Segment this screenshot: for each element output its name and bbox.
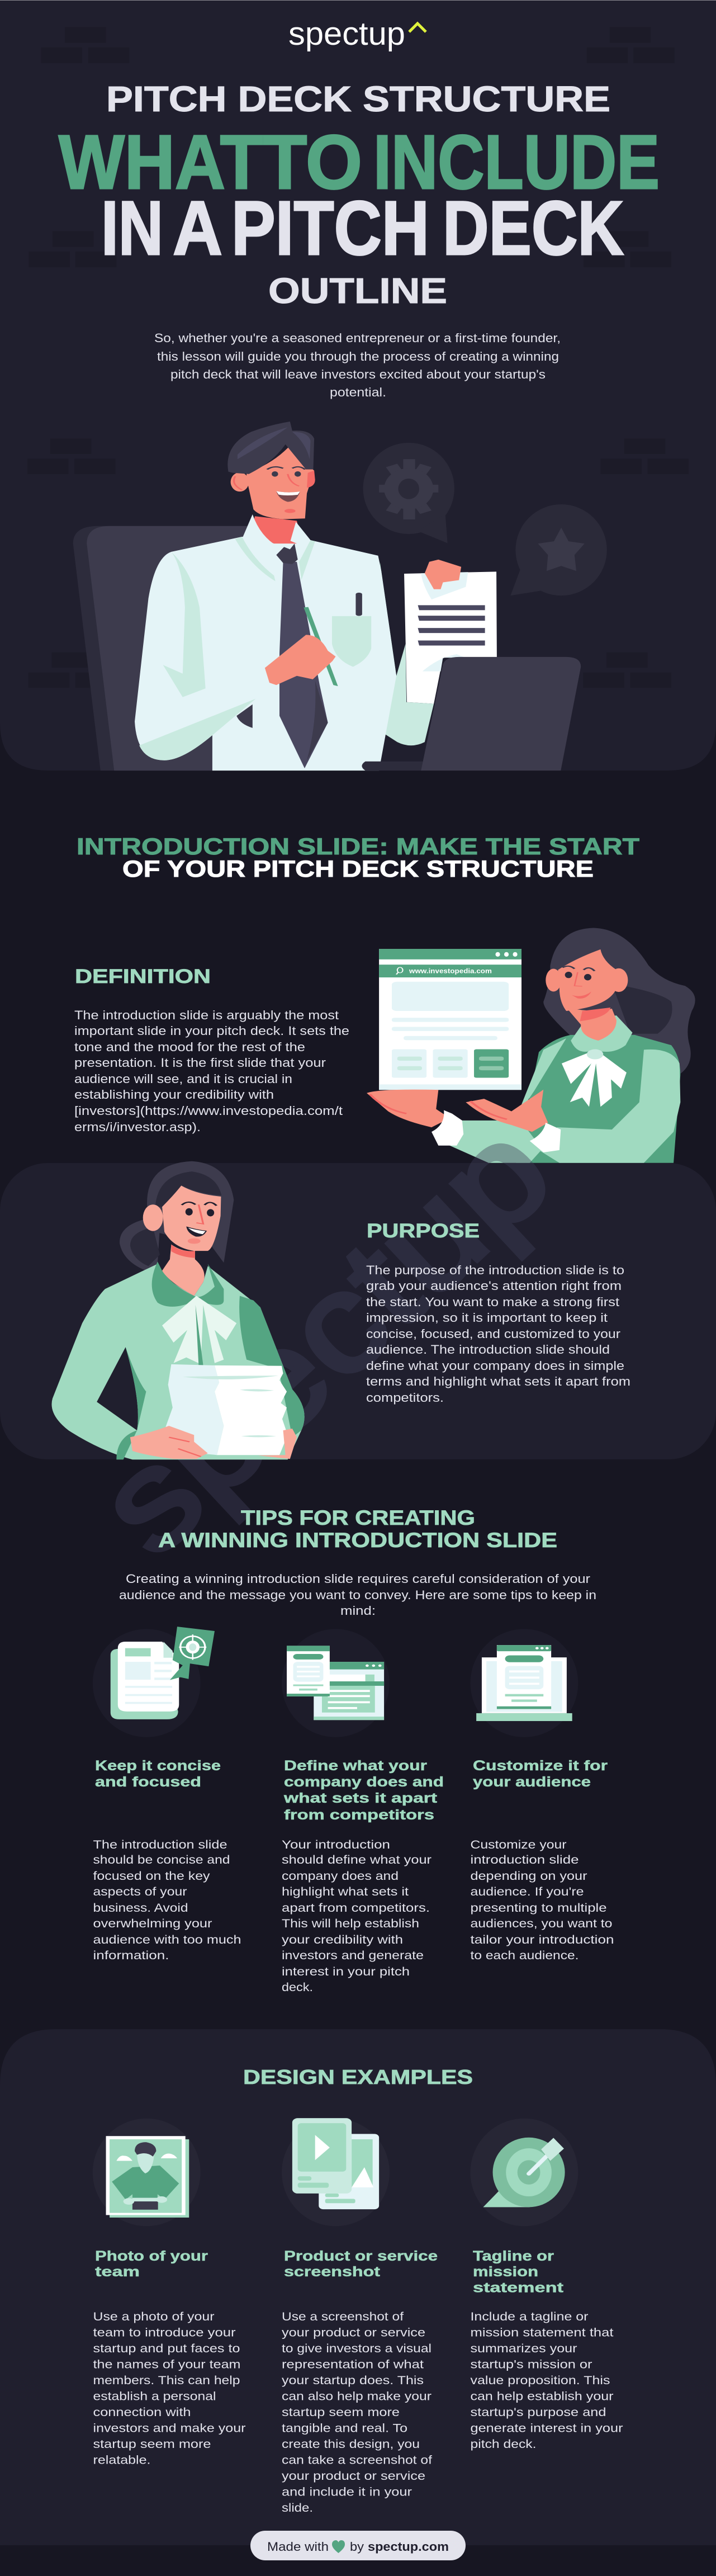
example 1: photo of your team: startup seem more: [93, 2438, 211, 2451]
tip 3: customize it: depending on your: [471, 1870, 587, 1883]
text: purpose body: terms and highlight what sets it apart from: [366, 1374, 630, 1388]
example 2: product or service screenshot: [282, 2248, 438, 2514]
example 1: photo of your team: team to introduce your: [93, 2326, 236, 2339]
footer pill: made with love by spectup.com: spectup.com: [368, 2540, 449, 2554]
section heading: introduction slide: [77, 833, 639, 882]
text: definition body: [investors](https://www.investopedia.com/t: [74, 1104, 343, 1118]
example 3: tagline or mission statement: startup's purpose and: [471, 2406, 606, 2419]
tip 3: customize it: tailor your introduction: [471, 1934, 614, 1946]
tip 3: customize it: to each audience.: [471, 1949, 579, 1962]
panel: hero background: [0, 0, 716, 771]
text: definition body: tone and the mood for the rest of the: [74, 1040, 305, 1054]
icon: gear speech bubble: [363, 443, 454, 543]
tip 2: define what your company does: your credibility with: [282, 1934, 403, 1946]
example 3: tagline or mission statement: Include a tagline or: [471, 2310, 588, 2323]
tip 2: define what your company does: from competitors: [284, 1807, 434, 1823]
example 3: tagline or mission statement: can help establish your: [471, 2390, 614, 2403]
example 3: tagline or mission statement: value proposition. This: [471, 2374, 610, 2387]
tip 3: customize it: [471, 1758, 614, 1962]
text: purpose body: competitors.: [366, 1391, 444, 1405]
illustration: man presenting document: [73, 422, 607, 771]
text: purpose body: define what your company does in simple: [366, 1359, 624, 1373]
example 2: product or service screenshot: Product or service: [284, 2248, 438, 2264]
text: tips intro: mind:: [340, 1604, 376, 1618]
icon: document with target: [93, 1627, 215, 1737]
example 1: photo of your team: Photo of your: [95, 2248, 208, 2264]
example 2: product or service screenshot: your startup does. This: [282, 2374, 424, 2387]
tip 2: define what your company does: company does and: [284, 1774, 444, 1790]
example 1: photo of your team: the names of your team: [93, 2358, 240, 2371]
example 3: tagline or mission statement: pitch deck.: [471, 2438, 537, 2451]
illustration: woman with paper stack: [51, 1161, 305, 1459]
watermark: spectup: [68, 1092, 579, 1584]
heading: tips: [158, 1506, 557, 1552]
tip 1: keep it concise: focused on the key: [93, 1870, 210, 1883]
example 2: product or service screenshot: representation of what: [282, 2358, 424, 2371]
example 1: photo of your team: establish a personal: [93, 2390, 216, 2403]
tie: [276, 543, 328, 768]
section heading: introduction slide: OF YOUR PITCH DECK STRUCTURE: [122, 855, 594, 882]
tip 2: define what your company does: investors and generate: [282, 1949, 424, 1962]
example 1: photo of your team: [93, 2248, 246, 2467]
tip 2: define what your company does: company does and: [282, 1870, 399, 1883]
tip 2: define what your company does: deck.: [282, 1981, 313, 1994]
title: WHAT: [59, 120, 263, 205]
intro paragraph: So, whether you're a seasoned entrepreneur or a first-time founder,: [154, 331, 561, 345]
intro paragraph: this lesson will guide you through the process of creating a winning: [157, 349, 559, 363]
design example icons: [93, 2118, 578, 2226]
footer pill: made with love by spectup.com: Made with: [267, 2540, 329, 2554]
tip 2: define what your company does: This will help establish: [282, 1917, 419, 1930]
example 3: tagline or mission statement: statement: [473, 2280, 564, 2296]
text: tips intro: audience and the message you want to convey. Here are some tips to keep in: [119, 1588, 596, 1602]
example 2: product or service screenshot: your product or service: [282, 2326, 425, 2339]
tip 3: customize it: introduction slide: [471, 1854, 579, 1866]
text: definition body: important slide in your pitch deck. It sets the: [74, 1024, 349, 1038]
tip 1: keep it concise: audience with too much: [93, 1934, 241, 1946]
tip icons: [93, 1627, 578, 1737]
title: OUTLINE: [268, 271, 447, 311]
tip 2: define what your company does: should define what your: [282, 1854, 432, 1866]
example 2: product or service screenshot: create this design, you: [282, 2438, 420, 2451]
tip 2: define what your company does: what sets it apart: [283, 1790, 438, 1806]
heading: purpose: PURPOSE: [367, 1220, 480, 1242]
text: definition body: erms/i/investor.asp).: [74, 1120, 201, 1134]
tip 1: keep it concise: and focused: [95, 1774, 201, 1790]
intro paragraph: pitch deck that will leave investors excited about your startup's: [170, 367, 546, 381]
text: tips intro: [119, 1572, 596, 1618]
tip 1: keep it concise: overwhelming your: [93, 1917, 212, 1930]
illustration: woman with browser window: [367, 928, 695, 1163]
example 1: photo of your team: team: [95, 2264, 140, 2280]
intro paragraph: potential.: [330, 385, 386, 399]
tip 3: customize it: audience. If you're: [471, 1885, 584, 1898]
example 2: product or service screenshot: slide.: [282, 2502, 313, 2514]
text: definition body: establishing your credibility with: [74, 1088, 274, 1102]
browser window: [379, 949, 521, 1090]
example 1: photo of your team: connection with: [93, 2406, 191, 2419]
tip 1: keep it concise: Keep it concise: [95, 1758, 221, 1774]
tip 1: keep it concise: [93, 1758, 241, 1962]
example 2: product or service screenshot: screenshot: [284, 2264, 381, 2280]
text: purpose body: concise, focused, and customized to your: [366, 1327, 620, 1341]
footer pill: made with love by spectup.com: [250, 2531, 466, 2560]
panel: purpose background: [0, 1163, 716, 1459]
example 2: product or service screenshot: startup seem more: [282, 2406, 400, 2419]
tip 3: customize it: presenting to multiple: [471, 1902, 607, 1915]
example 3: tagline or mission statement: mission statement that: [471, 2326, 614, 2339]
tip 1: keep it concise: The introduction slide: [93, 1838, 227, 1851]
icon: browser windows: [282, 1629, 390, 1737]
example 2: product or service screenshot: tangible and real. To: [282, 2422, 407, 2435]
heading: definition: DEFINITION: [75, 966, 211, 987]
tip 1: keep it concise: should be concise and: [93, 1854, 230, 1866]
shirt: [135, 537, 396, 771]
icon: star speech bubble: [510, 504, 607, 595]
tip 2: define what your company does: Define what your: [284, 1758, 427, 1774]
example 2: product or service screenshot: Use a screenshot of: [282, 2310, 404, 2323]
tip 3: customize it: Customize it for: [473, 1758, 608, 1774]
tip 2: define what your company does: [282, 1758, 444, 1994]
heading: tips: A WINNING INTRODUCTION SLIDE: [158, 1529, 557, 1552]
heading: design examples: DESIGN EXAMPLES: [243, 2065, 473, 2088]
text: definition body: presentation. It is the first slide that your: [74, 1056, 326, 1070]
intro paragraph: [154, 331, 561, 399]
tip 1: keep it concise: aspects of your: [93, 1885, 187, 1898]
tip 1: keep it concise: information.: [93, 1949, 169, 1962]
example 3: tagline or mission statement: summarizes your: [471, 2342, 577, 2355]
example 2: product or service screenshot: can also help make your: [282, 2390, 432, 2403]
icon: laptop with document: [471, 1629, 578, 1737]
title: A: [173, 186, 222, 271]
logo: spectup: spectup: [288, 16, 405, 52]
right arm and paper: [379, 560, 497, 745]
title: [59, 79, 660, 311]
title: TO: [263, 120, 362, 205]
woman: [438, 928, 695, 1163]
heading: tips: TIPS FOR CREATING: [241, 1506, 475, 1529]
example 2: product or service screenshot: your product or service: [282, 2470, 425, 2483]
head: [227, 422, 315, 519]
chair: [73, 526, 256, 771]
tip 2: define what your company does: highlight what sets it: [282, 1885, 409, 1898]
example 1: photo of your team: members. This can help: [93, 2374, 240, 2387]
text: purpose body: audience. The introduction slide should: [366, 1343, 610, 1356]
tip 3: customize it: Customize your: [471, 1838, 567, 1851]
example 2: product or service screenshot: can take a screenshot of: [282, 2454, 432, 2467]
example 3: tagline or mission statement: Tagline or: [473, 2248, 554, 2264]
text: purpose body: impression, so it is important to keep it: [366, 1311, 608, 1325]
neck and collar: [235, 514, 315, 581]
tip 2: define what your company does: apart from competitors.: [282, 1902, 430, 1915]
laptop: [362, 657, 581, 771]
tip 1: keep it concise: business. Avoid: [93, 1902, 188, 1915]
text: purpose body: the start. You want to make a strong first: [366, 1295, 619, 1309]
text: definition body: audience will see, and it is crucial in: [74, 1072, 292, 1086]
text: purpose body: grab your audience's attention right from: [366, 1279, 622, 1293]
title: PITCH: [231, 186, 429, 271]
icon: team photo: [93, 2119, 201, 2226]
tip 2: define what your company does: Your introduction: [282, 1838, 390, 1851]
example 1: photo of your team: startup and put faces to: [93, 2342, 240, 2355]
example 3: tagline or mission statement: generate interest in your: [471, 2422, 623, 2435]
title: DECK: [443, 186, 624, 271]
tip 3: customize it: your audience: [473, 1774, 591, 1790]
example 1: photo of your team: relatable.: [93, 2454, 151, 2467]
title: INCLUDE: [373, 120, 660, 205]
example 2: product or service screenshot: to give investors a visual: [282, 2342, 432, 2355]
example 1: photo of your team: Use a photo of your: [93, 2310, 215, 2323]
footer pill: made with love by spectup.com: by: [350, 2540, 364, 2554]
title: PITCH DECK STRUCTURE: [106, 79, 610, 119]
icon: target with dart: [471, 2119, 578, 2226]
text: tips intro: Creating a winning introduction slide requires careful consideration of your: [126, 1572, 590, 1586]
example 3: tagline or mission statement: startup's mission or: [471, 2358, 592, 2371]
tip 2: define what your company does: interest in your pitch: [282, 1965, 410, 1978]
icon: product screenshot: [282, 2118, 390, 2226]
text: definition body: [74, 1008, 349, 1134]
illustration: woman with browser window: www.investopedia.com: [409, 967, 492, 975]
section heading: introduction slide: INTRODUCTION SLIDE: MAKE THE START: [77, 833, 639, 859]
panel: design examples background: [0, 2029, 716, 2545]
example 3: tagline or mission statement: mission: [473, 2264, 538, 2280]
example 2: product or service screenshot: and include it in your: [282, 2486, 412, 2498]
title: IN: [101, 186, 163, 271]
tip 3: customize it: audiences, you want to: [471, 1917, 613, 1930]
text: purpose body: [366, 1263, 630, 1405]
hands: [367, 1090, 561, 1152]
example 3: tagline or mission statement: [471, 2248, 623, 2451]
hand holding pen: [246, 607, 338, 695]
example 1: photo of your team: investors and make your: [93, 2422, 246, 2435]
text: definition body: The introduction slide is arguably the most: [74, 1008, 339, 1022]
text: purpose body: The purpose of the introduction slide is to: [366, 1263, 624, 1277]
